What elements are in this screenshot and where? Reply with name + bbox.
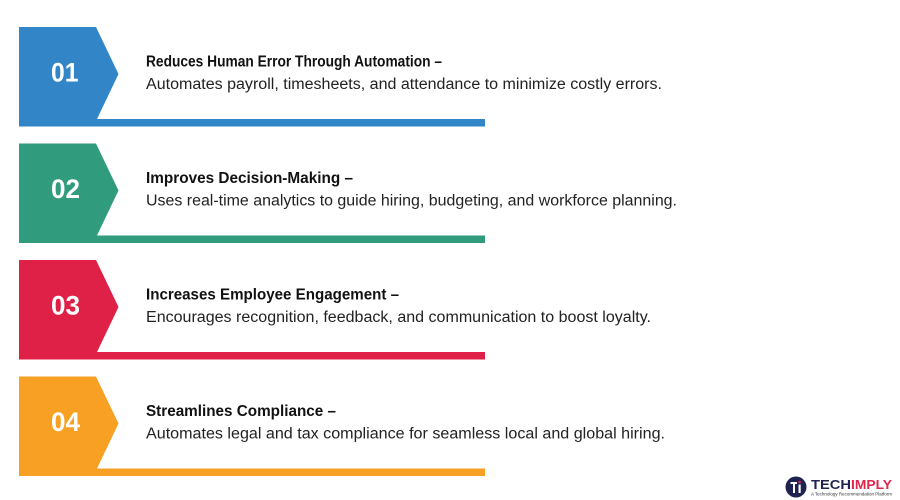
- panel: item 03: [19, 260, 651, 360]
- banner shape 04: [19, 376, 485, 476]
- description 01: Automates payroll, timesheets, and attendance to minimize costly errors.: [146, 76, 662, 93]
- logo: TechImply: IMPLY: [851, 478, 893, 492]
- banner shape 02: [19, 144, 485, 243]
- number 03: 03: [51, 290, 80, 320]
- logo icon: [786, 476, 806, 498]
- panel: item 01: [19, 27, 662, 126]
- description 04: Automates legal and tax compliance for seamless local and global hiring.: [146, 426, 665, 442]
- description 02: Uses real-time analytics to guide hiring, budgeting, and workforce planning.: [146, 192, 677, 210]
- banner shape 03: [19, 260, 485, 360]
- panel: item 04: [19, 376, 665, 476]
- description 03: Encourages recognition, feedback, and communication to boost loyalty.: [146, 309, 651, 326]
- logo: TechImply: [786, 476, 893, 498]
- heading 01: Reduces Human Error Through Automation –: [146, 54, 442, 70]
- number 02: 02: [51, 174, 80, 204]
- panel: item 02: [19, 144, 677, 243]
- heading 04: Streamlines Compliance –: [146, 403, 336, 420]
- number 04: 04: [51, 407, 80, 437]
- number 01: 01: [51, 58, 78, 88]
- logo tagline: A Technology Recommendation Platform: [811, 492, 892, 496]
- logo wordmark: TECH: [811, 478, 851, 492]
- banner shape 01: [19, 27, 485, 126]
- heading 03: Increases Employee Engagement –: [146, 286, 399, 304]
- heading 02: Improves Decision-Making –: [146, 170, 353, 187]
